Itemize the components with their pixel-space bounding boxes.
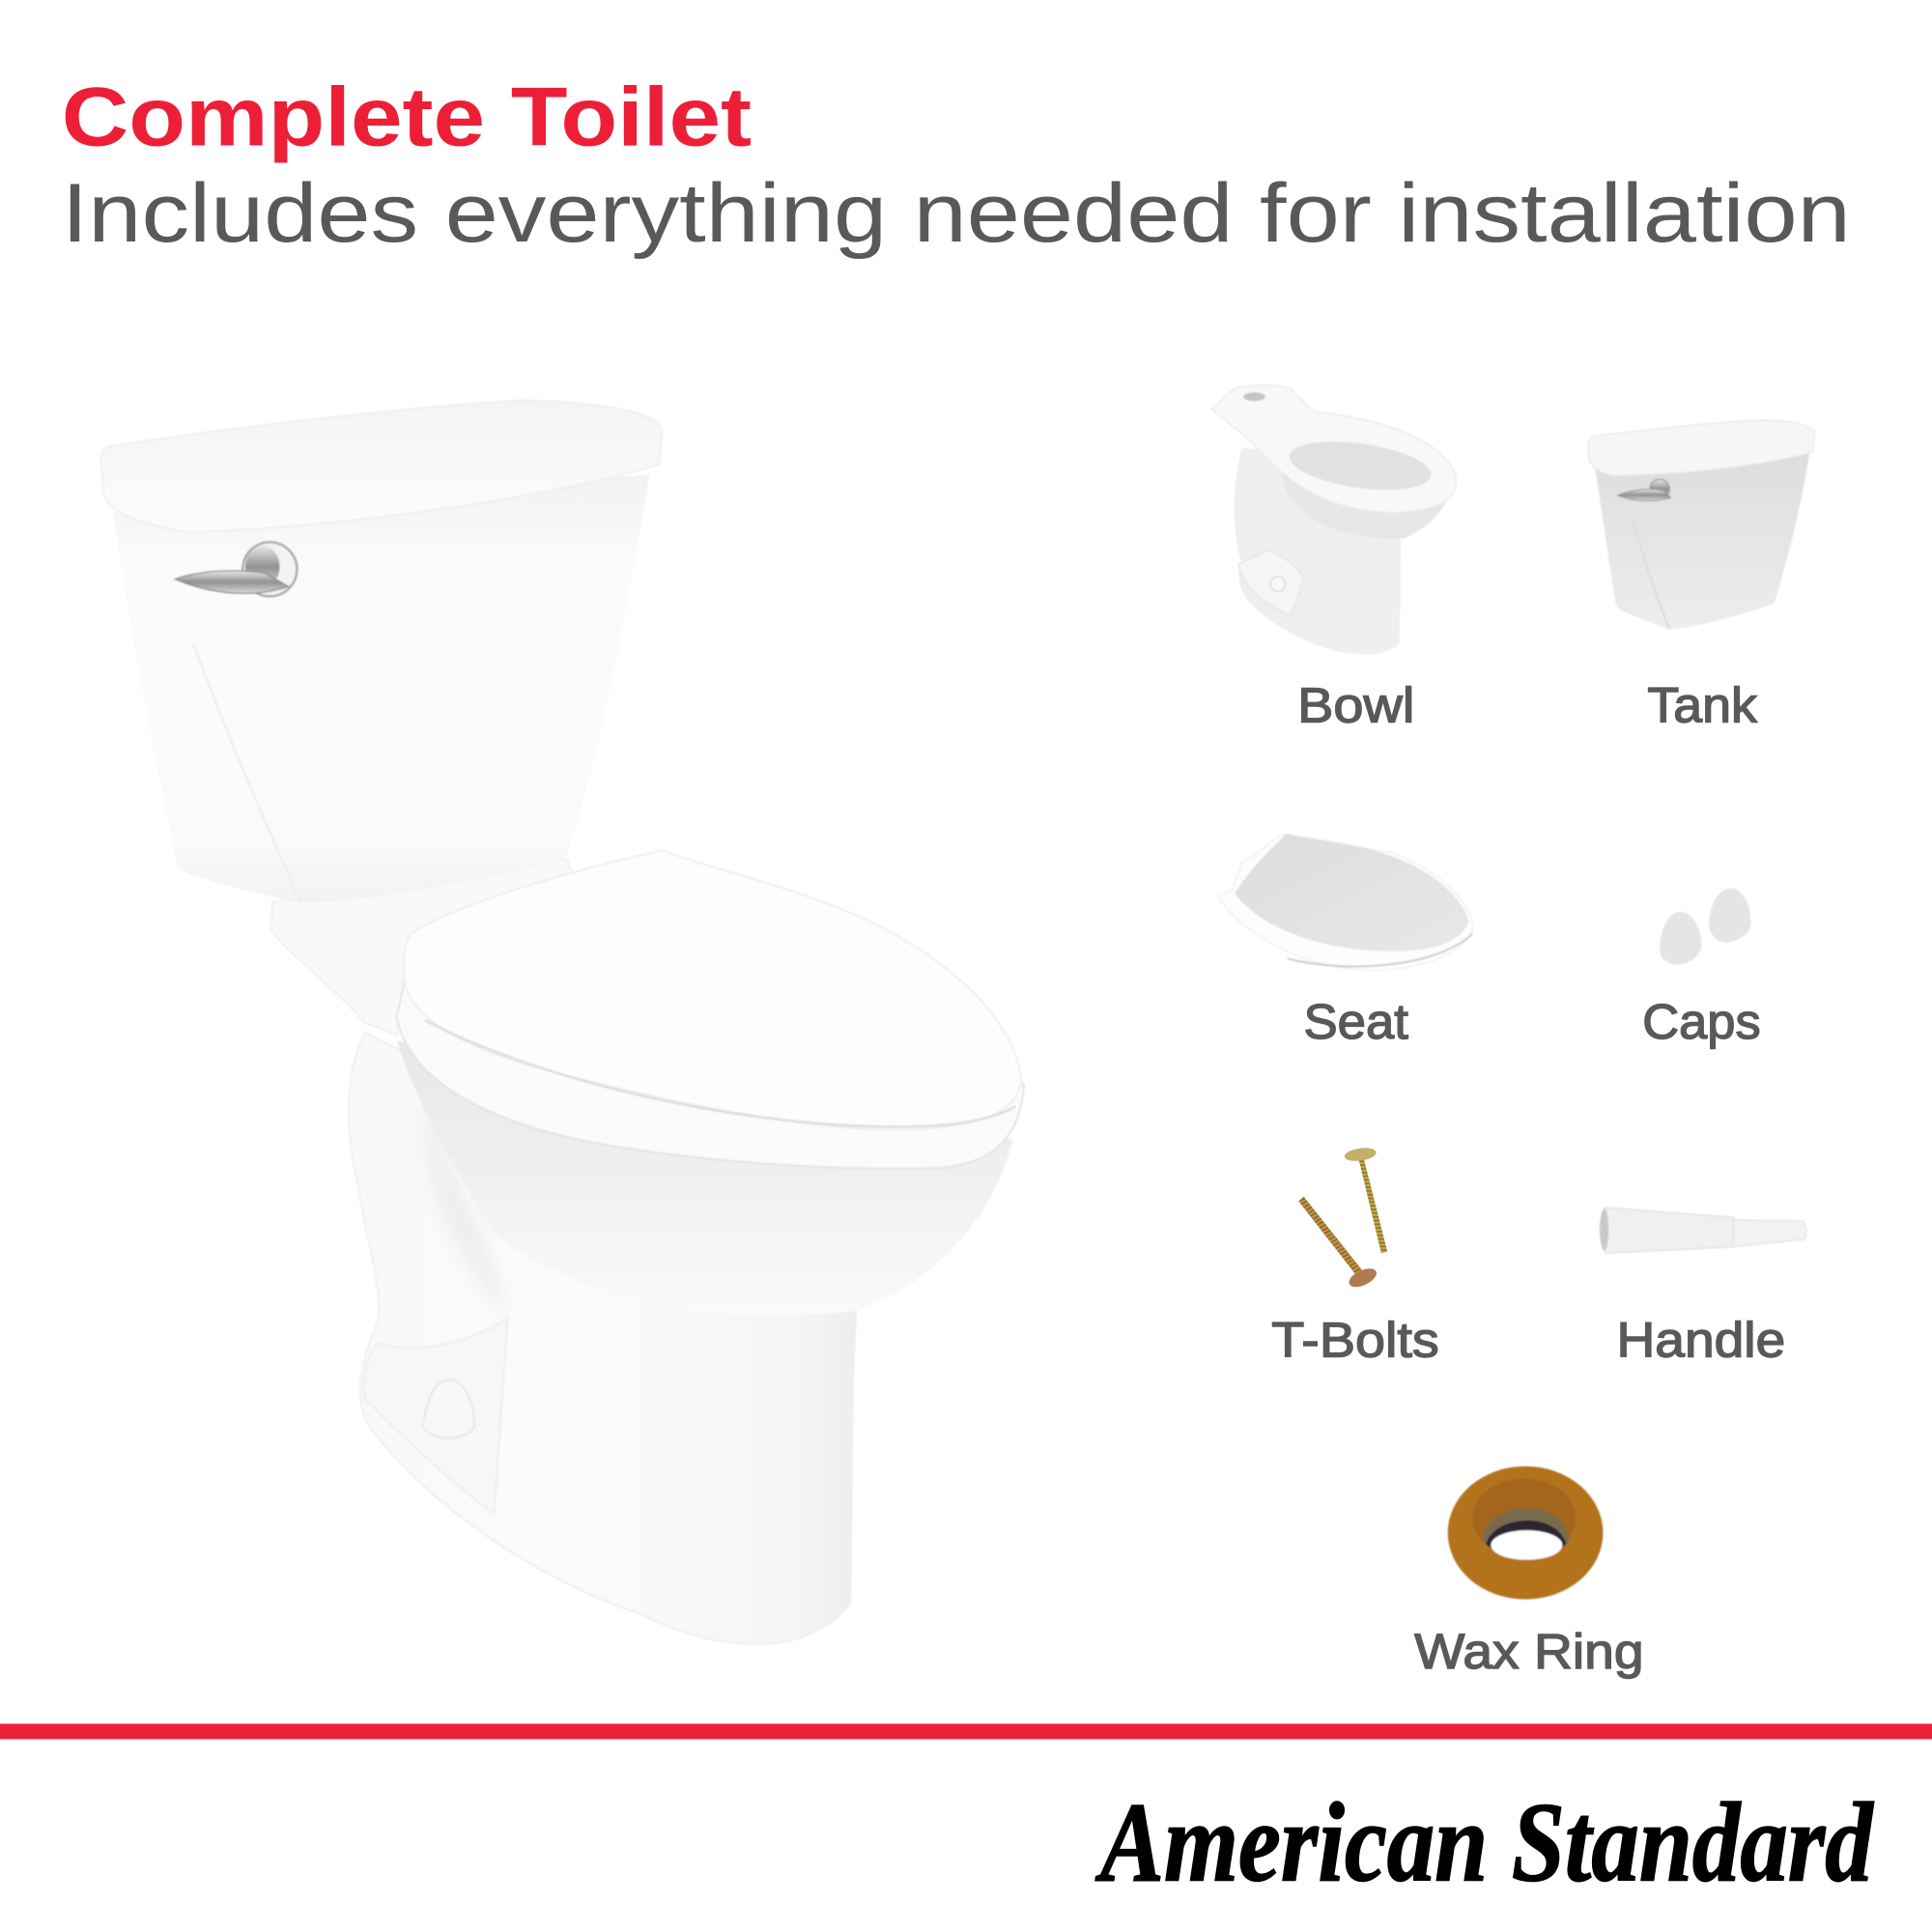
tank image xyxy=(1588,420,1815,630)
neck xyxy=(271,860,579,1035)
part: wax ring xyxy=(1414,1466,1644,1679)
side shading xyxy=(423,1096,510,1319)
handle label: Handle xyxy=(1616,1312,1785,1367)
handle image xyxy=(1600,1208,1806,1253)
seat lid xyxy=(404,850,1021,1130)
part: t-bolts xyxy=(1271,1147,1439,1367)
wax ring image xyxy=(1448,1466,1603,1600)
tank body xyxy=(113,474,649,903)
part: seat xyxy=(1217,835,1474,1049)
subheading: Includes everything needed for installation xyxy=(62,166,1851,260)
tank label: Tank xyxy=(1647,677,1757,732)
flush handle xyxy=(175,542,297,596)
seat rim line xyxy=(425,1020,1015,1126)
seat ring xyxy=(397,974,1024,1169)
t-bolts label: T-Bolts xyxy=(1271,1312,1439,1367)
tank lid xyxy=(101,401,662,532)
part: tank xyxy=(1588,420,1815,732)
seat label: Seat xyxy=(1303,994,1408,1049)
caps label: Caps xyxy=(1642,994,1761,1049)
bowl image xyxy=(1211,385,1457,654)
bolt cap xyxy=(423,1380,474,1438)
bowl label: Bowl xyxy=(1297,677,1414,732)
tank crease xyxy=(193,643,300,903)
main toilet illustration xyxy=(101,401,1024,1644)
part: caps xyxy=(1642,889,1761,1049)
title xyxy=(62,71,1851,260)
red divider xyxy=(0,1723,1932,1739)
bolts image xyxy=(1298,1147,1387,1291)
foot recess xyxy=(364,1319,508,1513)
caps image xyxy=(1660,889,1750,965)
seat image xyxy=(1217,835,1474,970)
back hump and base xyxy=(349,1033,856,1644)
bowl xyxy=(397,1041,1012,1316)
part: handle xyxy=(1600,1208,1806,1367)
heading: Complete Toilet: Complete Toilet xyxy=(62,71,752,164)
part: bowl xyxy=(1211,385,1457,732)
wax ring label: Wax Ring xyxy=(1414,1624,1644,1679)
